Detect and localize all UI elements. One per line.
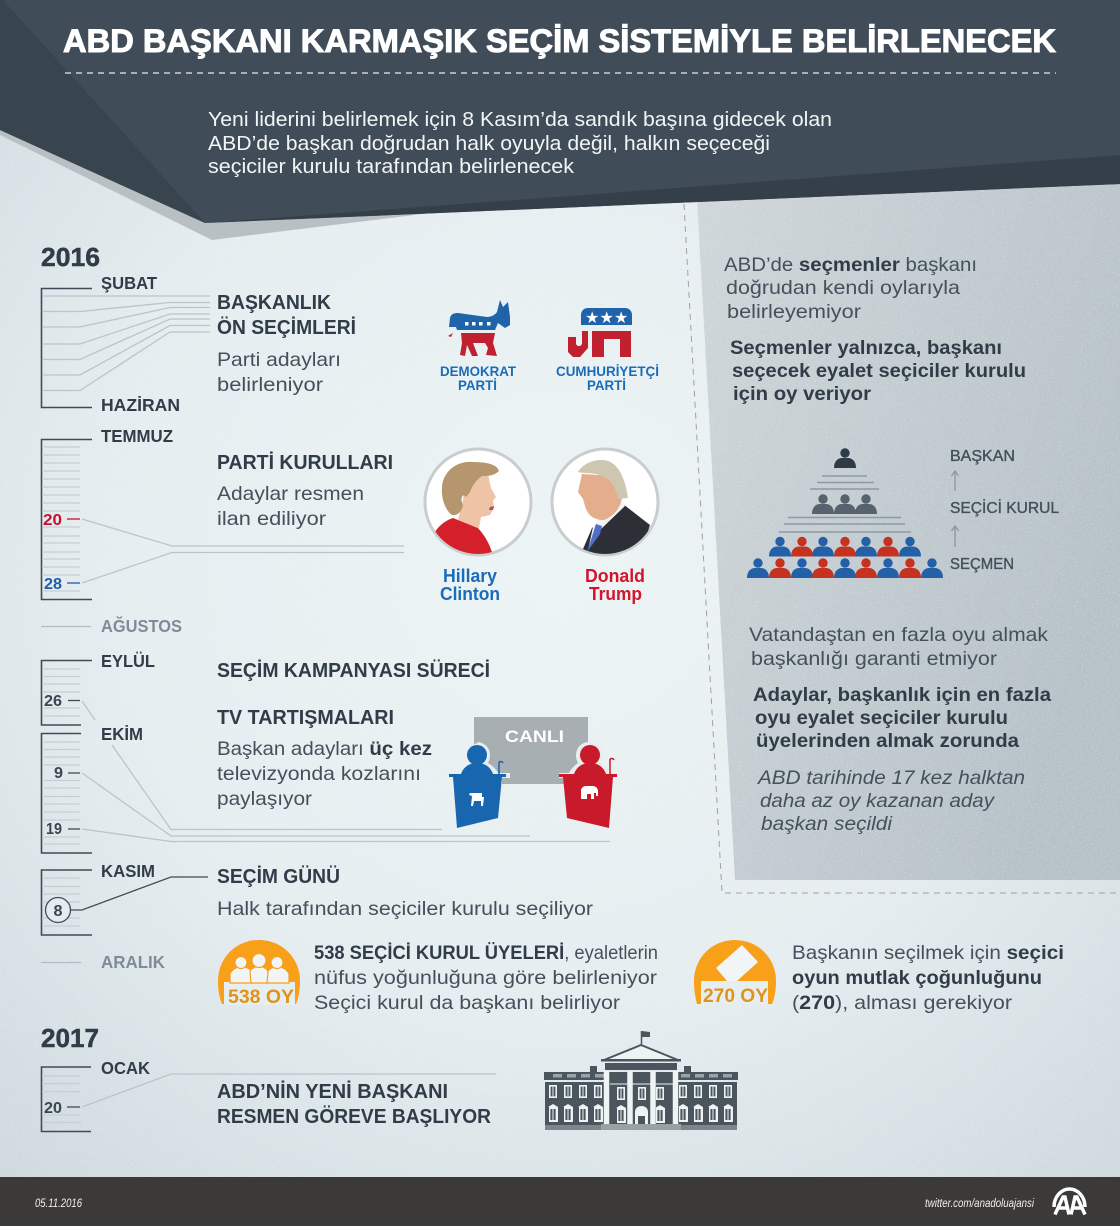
heading: inauguration [217, 1080, 492, 1128]
right text: most votes not sufficient: oyu eyalet seçiciler kurulu [755, 707, 1008, 729]
party labels: PARTİ [587, 377, 626, 393]
intro text: Yeni liderini belirlemek için 8 Kasım’da sandık başına gidecek olan [208, 109, 832, 131]
pyramid labels: SEÇMEN [950, 556, 1014, 573]
text: 538 electors: Seçici kurul da başkanı belirliyor [314, 992, 621, 1014]
right text: voters cannot decide directly: doğrudan kendi oylarıyla [726, 277, 960, 299]
icon: republican elephant: ★ [585, 310, 599, 327]
timeline: Kasım: 8 [54, 903, 63, 920]
president [834, 448, 856, 468]
panel: right explanation background [697, 180, 1120, 880]
text: 270 majority: Başkanın seçilmek için seçici [792, 942, 1064, 964]
timeline: Ekim: EKİM [101, 724, 143, 744]
pyramid labels: SEÇİCİ KURUL [950, 498, 1059, 517]
candidate names [440, 566, 645, 604]
intro text [208, 109, 832, 178]
timeline: Temmuz [42, 426, 404, 600]
timeline: Temmuz: 20 [43, 512, 62, 529]
heading: election day [217, 865, 594, 920]
text: 538 electors: nüfus yoğunluğuna göre belirleniyor [314, 967, 658, 989]
heading: TV debates: paylaşıyor [217, 788, 313, 810]
text: 538 electors: 538 SEÇİCİ KURUL ÜYELERİ, eyaletlerin [314, 941, 658, 964]
heading: election day: SEÇİM GÜNÜ [217, 865, 340, 888]
electors [812, 494, 877, 514]
icon: White House [544, 1031, 738, 1130]
candidate names: Trump [589, 584, 642, 604]
month: Ağustos: AĞUSTOS [101, 615, 182, 636]
year 2016: 2016 [41, 242, 100, 272]
timeline: Ocak: 20 [44, 1100, 62, 1117]
portrait: Donald Trump [552, 449, 658, 556]
title: ABD BAŞKANI KARMAŞIK SEÇİM SİSTEMİYLE BELİRLENECEK [63, 23, 1056, 59]
heading: inauguration: RESMEN GÖREVE BAŞLIYOR [217, 1105, 492, 1128]
heading: election day: Halk tarafından seçiciler kurulu seçiliyor [217, 898, 594, 920]
icon: democrat donkey [448, 300, 510, 356]
text: 270 majority: (270), alması gerekiyor [792, 992, 1013, 1014]
timeline: Ekim: 9 [54, 765, 63, 782]
right text: voters cannot decide directly: Seçmenler yalnızca, başkanı [730, 337, 1002, 359]
timeline: primaries Şubat to Haziran [42, 273, 210, 415]
voters red [769, 537, 921, 578]
heading: party conventions: PARTİ KURULLARI [217, 451, 393, 474]
pyramid labels [950, 448, 1059, 573]
text: 270 majority [792, 942, 1064, 1014]
right text: most votes not sufficient: üyelerinden almak zorunda [756, 730, 1019, 752]
party labels: DEMOKRAT [440, 363, 516, 379]
icon: 538 votes: 538 OY [228, 987, 294, 1008]
right text: most votes not sufficient: Adaylar, başkanlık için en fazla [753, 684, 1051, 706]
heading: TV debates: TV TARTIŞMALARI [217, 707, 394, 729]
icon: 270 votes: 270 OY [703, 986, 768, 1007]
heading: TV debates [217, 707, 432, 810]
dashed panel outline [684, 204, 1120, 893]
month: Aralık [41, 952, 165, 972]
right text: most votes not sufficient: Vatandaştan en fazla oyu almak [749, 624, 1048, 646]
heading: party conventions: ilan ediliyor [217, 508, 327, 530]
right text: historical note: başkan seçildi [761, 813, 893, 835]
party labels: CUMHURİYETÇİ [556, 363, 659, 379]
right text: historical note: ABD tarihinde 17 kez halktan [757, 767, 1025, 789]
icon: AA logo [1054, 1189, 1085, 1214]
candidate names: Clinton [440, 584, 500, 604]
timeline: Ocak: OCAK [101, 1058, 150, 1078]
icon: republican elephant [568, 308, 632, 357]
icon: republican elephant: ★ [600, 310, 614, 327]
arrows [952, 471, 958, 547]
portrait: Hillary Clinton [425, 449, 531, 556]
icon: live debate [449, 717, 619, 828]
right text: voters cannot decide directly: seçecek eyalet seçiciler kurulu [732, 360, 1026, 382]
voters blue [747, 537, 943, 578]
candidate names: Donald [585, 566, 645, 586]
timeline: Ekim: 19 [46, 821, 62, 838]
month: Aralık: ARALIK [101, 952, 165, 972]
heading: inauguration: ABD’NİN YENİ BAŞKANI [217, 1080, 448, 1103]
candidate names: Hillary [443, 566, 497, 586]
timeline: Kasım: KASIM [101, 861, 155, 881]
header banner [0, 0, 1120, 240]
right text: historical note [757, 767, 1025, 835]
right text: voters cannot decide directly: için oy veriyor [733, 383, 871, 405]
heading: primaries: ÖN SEÇİMLERİ [217, 316, 356, 339]
timeline: Ekim [42, 724, 610, 853]
chart: electoral pyramid [747, 448, 1059, 578]
heading: primaries: BAŞKANLIK [217, 292, 332, 314]
icon: 538 votes [218, 940, 300, 1008]
heading: primaries [217, 292, 356, 396]
right text: voters cannot decide directly: belirleyemiyor [727, 301, 862, 323]
pyramid labels: BAŞKAN [950, 448, 1015, 465]
timeline: Eylül [42, 651, 155, 725]
timeline: Temmuz: 28 [44, 576, 62, 593]
year 2017: 2017 [41, 1023, 99, 1053]
footer [0, 1177, 1120, 1226]
icon: live debate: CANLI [505, 727, 564, 746]
heading: TV debates: televizyonda kozlarını [217, 763, 421, 785]
right text: historical note: daha az oy kazanan aday [760, 790, 995, 812]
text: 538 electors [314, 941, 658, 1014]
footer: twitter.com/anadoluajansi [925, 1196, 1034, 1210]
heading: party conventions [217, 451, 393, 530]
heading: primaries: belirleniyor [217, 374, 324, 396]
timeline: primaries Şubat to Haziran: ŞUBAT [101, 273, 157, 293]
right text: most votes not sufficient: başkanlığı garanti etmiyor [751, 648, 998, 670]
right text: most votes not sufficient [749, 624, 1051, 752]
timeline: Kasım [42, 861, 208, 935]
right text: voters cannot decide directly: ABD’de seçmenler başkanı [724, 254, 977, 276]
text: 270 majority: oyun mutlak çoğunluğunu [792, 967, 1042, 989]
intro text: seçiciler kurulu tarafından belirlenecek [208, 156, 575, 178]
intro text: ABD’de başkan doğrudan halk oyuyla değil, halkın seçeceği [208, 133, 770, 155]
icon: 270 votes [694, 940, 776, 1007]
heading: TV debates: Başkan adayları üç kez [217, 738, 432, 760]
heading: party conventions: Adaylar resmen [217, 483, 364, 505]
timeline: Temmuz: TEMMUZ [101, 426, 173, 446]
timeline: primaries Şubat to Haziran: HAZİRAN [101, 395, 180, 415]
right text: voters cannot decide directly [724, 254, 1026, 405]
heading: campaign process: SEÇİM KAMPANYASI SÜRECİ [217, 659, 490, 682]
party labels [440, 363, 659, 393]
heading: primaries: Parti adayları [217, 349, 341, 371]
timeline: Eylül: 26 [44, 693, 62, 710]
party labels: PARTİ [458, 377, 497, 393]
timeline: Ocak [42, 1058, 496, 1132]
timeline: Eylül: EYLÜL [101, 651, 155, 671]
icon: republican elephant: ★ [614, 310, 628, 327]
footer: 05.11.2016 [35, 1196, 82, 1210]
